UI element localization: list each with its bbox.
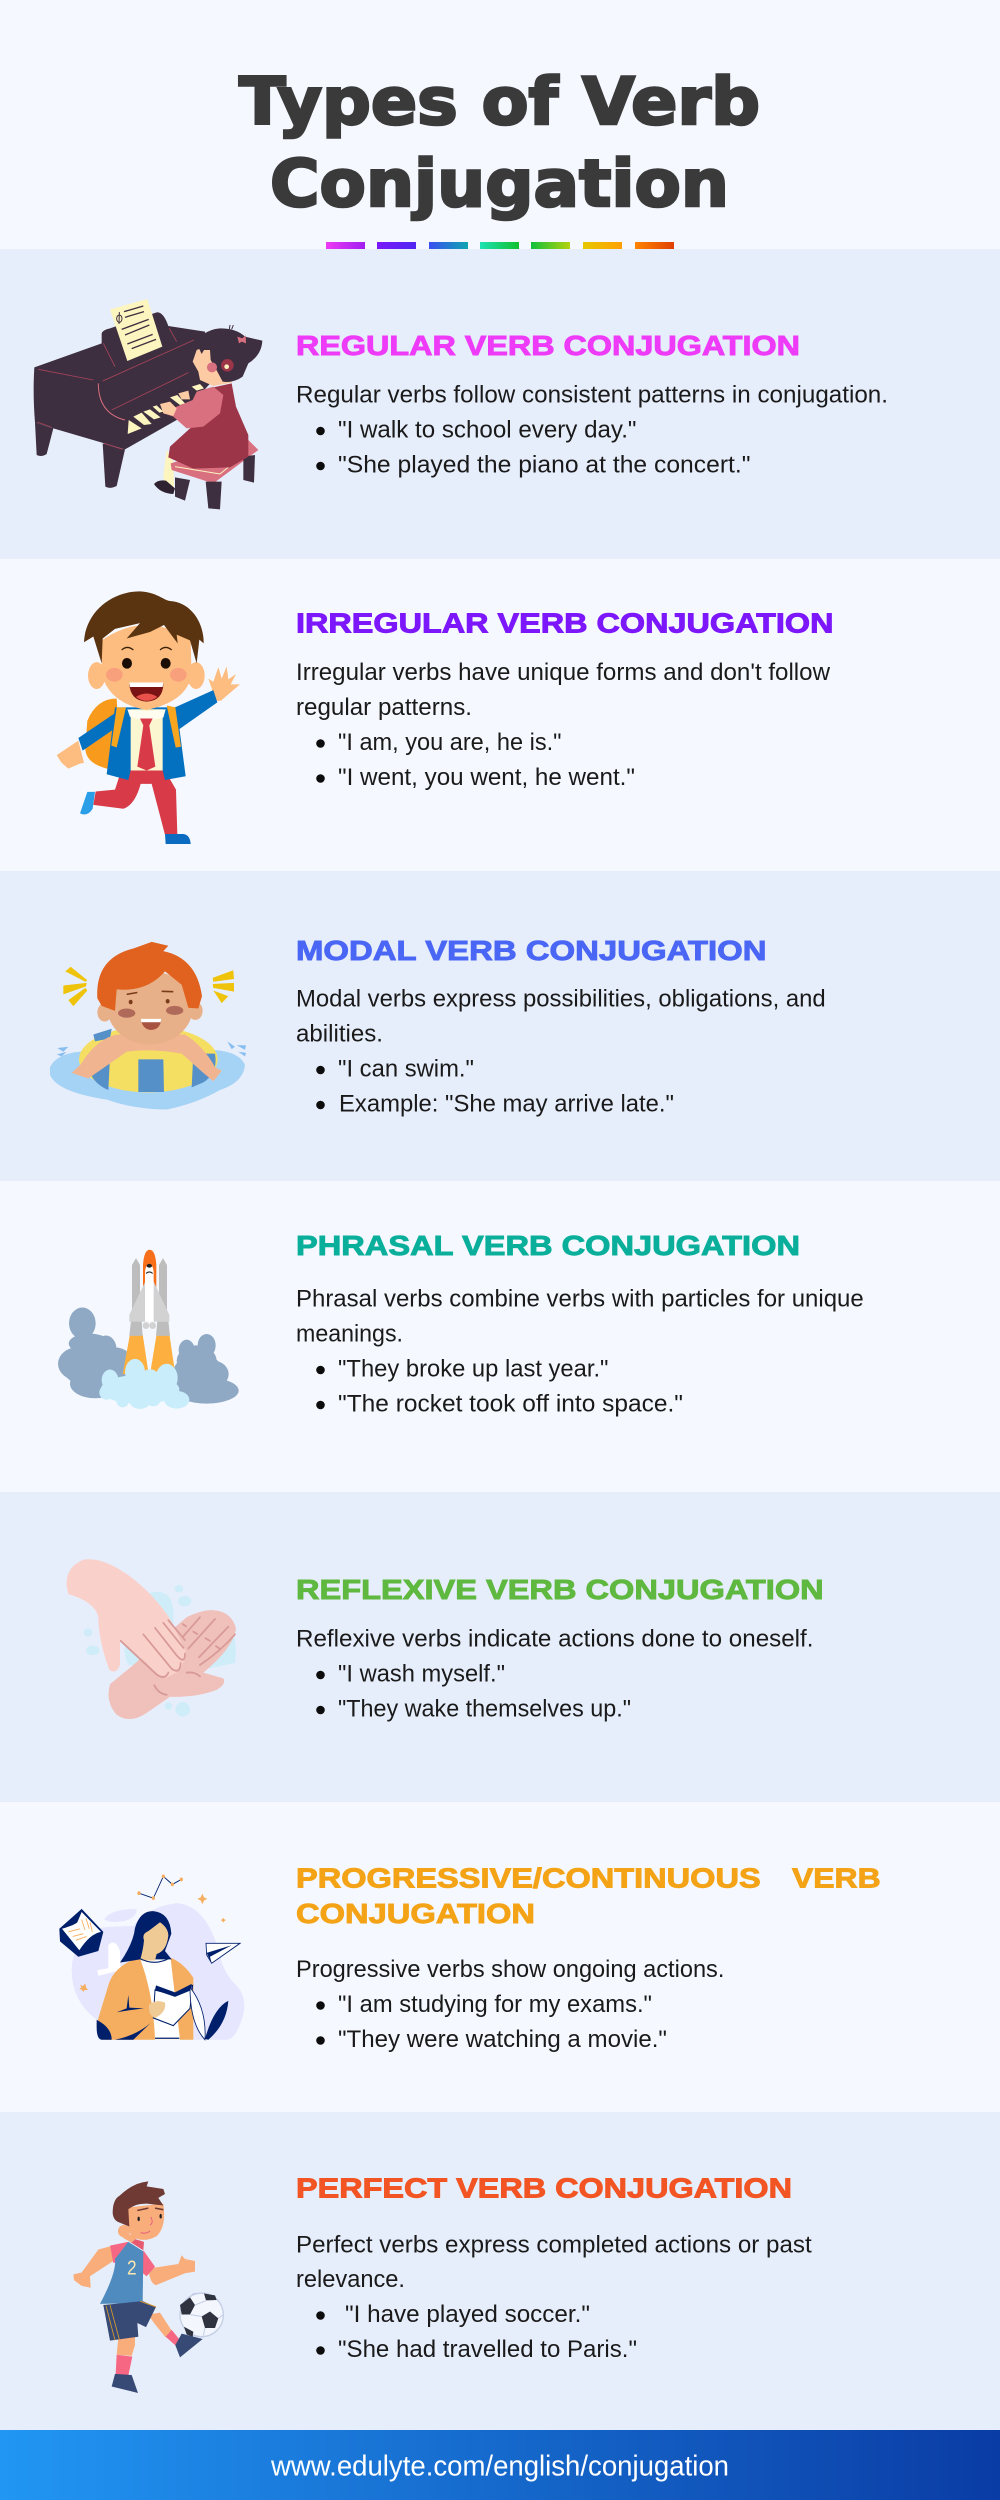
icon: schoolboy waving [57,591,240,844]
panel: perfect verb conjugation [0,2112,1000,2430]
description [296,986,826,1048]
bullet list [316,416,750,478]
bullet list [316,1356,683,1418]
description: Progressive verbs show ongoing actions. [296,1956,724,1983]
bullet list: "I have played soccer." [345,2301,590,2328]
bullet list: "She had travelled to Paris." [338,2336,637,2363]
bullet list: "I walk to school every day." [338,416,636,444]
description: Regular verbs follow consistent patterns in conjugation. [296,382,888,408]
heading: PROGRESSIVE/CONTINUOUS [296,1863,761,1894]
icon: boy kicking soccer ball [73,2181,223,2393]
description: Phrasal verbs combine verbs with particles for unique [296,1286,864,1313]
description: relevance. [296,2266,405,2293]
heading [296,1863,881,1929]
heading: VERB [792,1863,881,1894]
description: abilities. [296,1021,383,1048]
heading: REFLEXIVE VERB CONJUGATION [296,1574,824,1605]
title [239,65,760,222]
icon: boy kicking soccer ball: 2 [127,2257,137,2279]
description [296,659,830,721]
heading: PERFECT VERB CONJUGATION [296,2173,792,2204]
description: Reflexive verbs indicate actions done to oneself. [296,1626,814,1653]
bullet list: "I am, you are, he is." [338,729,562,756]
panel: reflexive verb conjugation [0,1492,1000,1802]
title: Conjugation [270,147,729,222]
bullet list [316,1056,674,1118]
bullet list: Example: "She may arrive late." [339,1091,674,1118]
heading: CONJUGATION [296,1898,535,1929]
panel: irregular verb conjugation [57,591,834,844]
heading: REGULAR VERB CONJUGATION [296,330,800,361]
bullet list: "The rocket took off into space." [338,1391,683,1418]
panel: phrasal verb conjugation [58,1230,864,1418]
bullet list: "She played the piano at the concert." [338,452,750,478]
icon: woman reading [59,1874,244,2040]
bullet list: "I am studying for my exams." [338,1991,652,2018]
bullet list: "I went, you went, he went." [338,764,635,791]
footer [0,2430,1000,2500]
bullet list [316,729,635,791]
bullet list [316,2301,637,2363]
panel: modal verb conjugation [0,871,1000,1181]
icon: boy in swim ring [50,942,246,1110]
icon: girl at piano [34,299,262,509]
description: meanings. [296,1321,403,1348]
bullet list: "They broke up last year." [338,1356,608,1383]
heading: IRREGULAR VERB CONJUGATION [296,608,834,639]
icon: rocket launch [58,1250,239,1409]
heading: MODAL VERB CONJUGATION [296,935,766,966]
description: Modal verbs express possibilities, obligations, and [296,986,826,1013]
colour bars under title [326,242,674,249]
icon: washing hands [67,1559,236,1719]
description [296,1286,864,1348]
description: Irregular verbs have unique forms and don't follow [296,659,830,686]
bullet list: "They wake themselves up." [338,1696,631,1723]
bullet list: "I can swim." [338,1056,474,1083]
heading: PHRASAL VERB CONJUGATION [296,1230,800,1261]
bullet list: "They were watching a movie." [338,2026,667,2053]
bullet list: "I wash myself." [338,1661,505,1688]
panel: regular verb conjugation [0,249,1000,559]
description: regular patterns. [296,694,472,721]
description [296,2232,812,2293]
panel: progressive/continuous verb conjugation [59,1863,881,2053]
title: Types of Verb [239,65,760,140]
description: Perfect verbs express completed actions or past [296,2232,812,2258]
bullet list [316,1661,631,1723]
bullet list [316,1991,667,2053]
footer link: www.edulyte.com/english/conjugation [270,2450,729,2482]
